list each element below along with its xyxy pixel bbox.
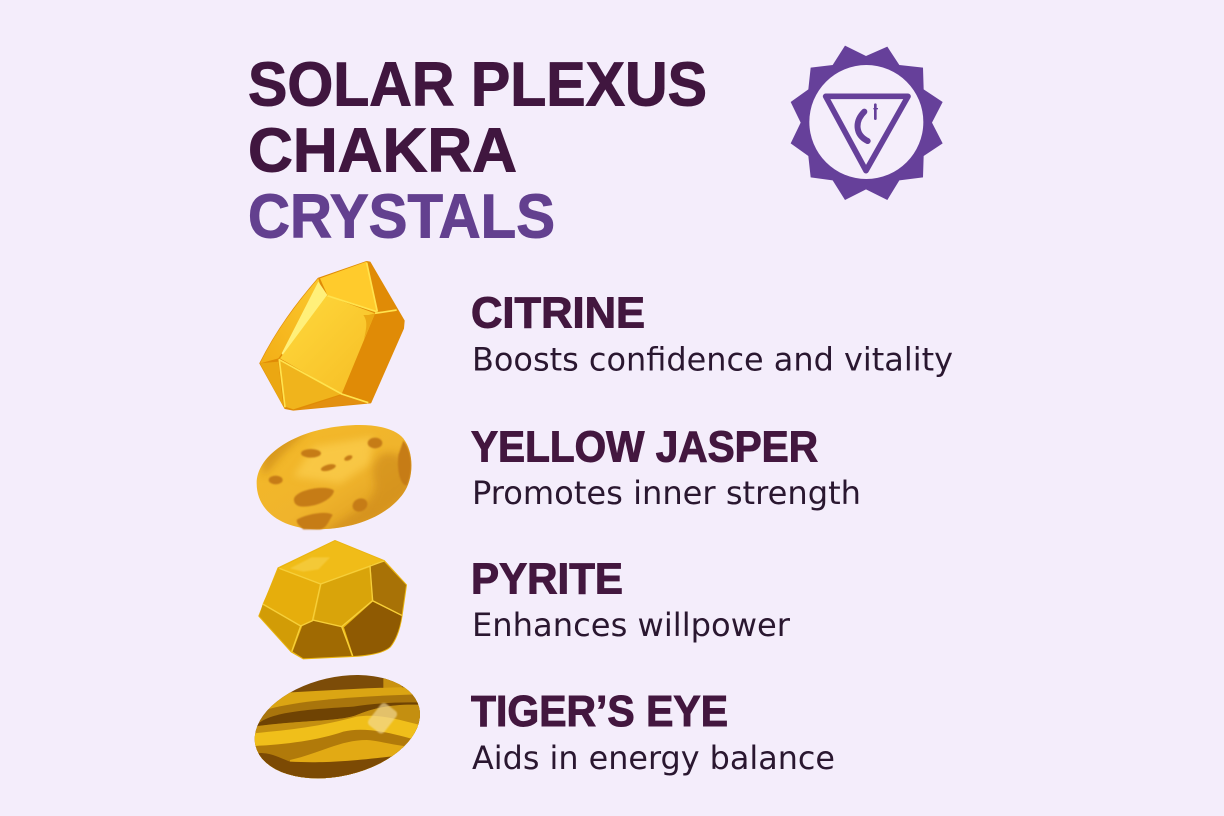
infographic canvas <box>249 46 952 778</box>
heading: yellow jasper: YELLOW JASPER <box>471 422 818 472</box>
title <box>248 50 707 252</box>
title: CHAKRA <box>248 116 517 186</box>
crystal row: citrine <box>260 262 953 410</box>
title: CRYSTALS <box>248 182 555 252</box>
description: tiger's eye: Aids in energy balance <box>472 739 835 777</box>
crystal row: tiger's eye <box>250 670 835 783</box>
icon: yellow jasper stone <box>257 425 411 533</box>
icon: citrine crystal <box>260 262 404 410</box>
description: citrine: Boosts confidence and vitality <box>472 340 953 378</box>
icon: tiger's eye stone <box>254 675 420 778</box>
crystal row: pyrite <box>259 541 791 658</box>
icon: pyrite crystal <box>259 541 406 658</box>
crystal row: yellow jasper <box>257 422 861 533</box>
icon: solar plexus chakra symbol <box>791 46 943 200</box>
description: yellow jasper: Promotes inner strength <box>472 474 861 512</box>
heading: citrine: CITRINE <box>471 288 645 338</box>
heading: pyrite: PYRITE <box>471 554 623 604</box>
title: SOLAR PLEXUS <box>248 50 707 120</box>
description: pyrite: Enhances willpower <box>472 606 791 644</box>
heading: tiger's eye: TIGER’S EYE <box>471 687 728 736</box>
